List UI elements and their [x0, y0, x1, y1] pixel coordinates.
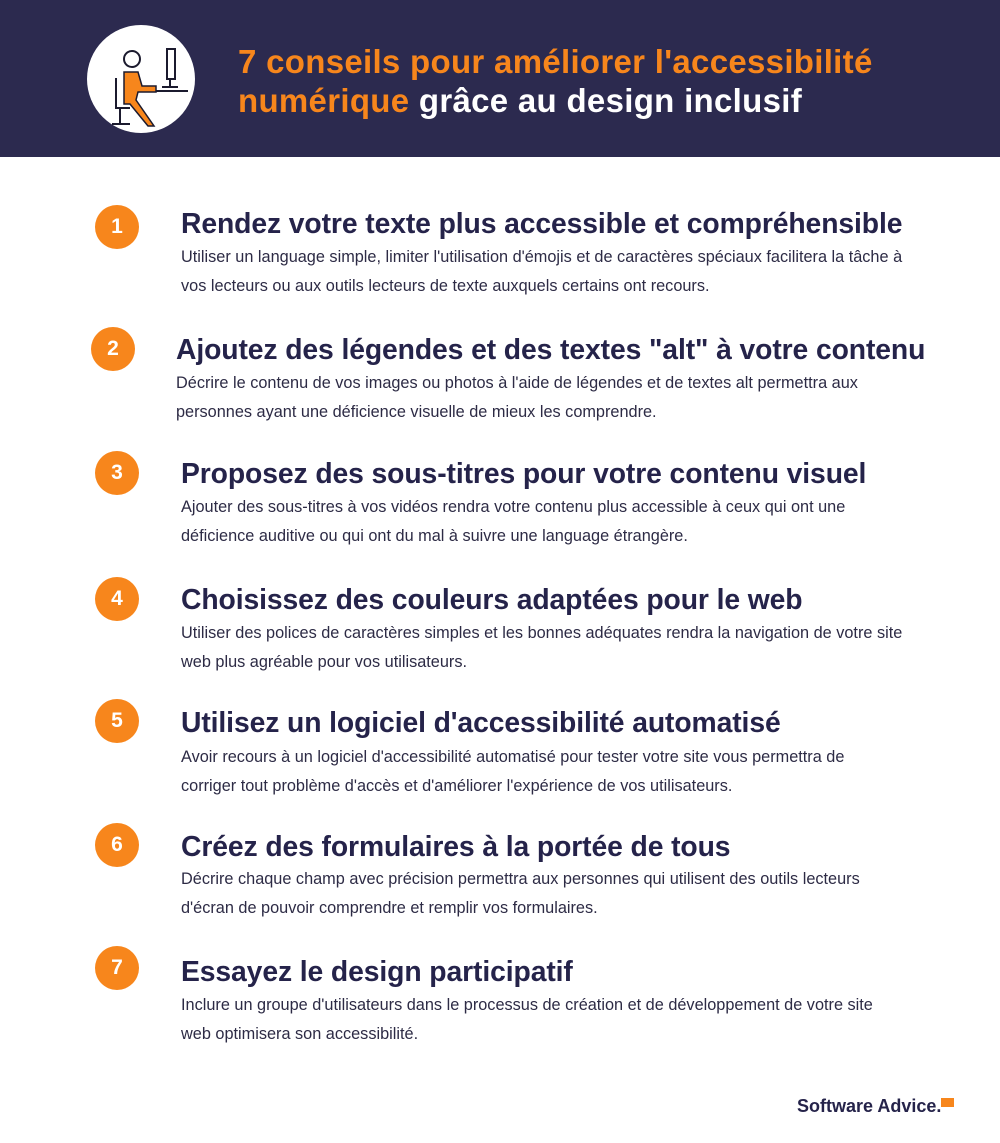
item 3 — [95, 451, 866, 545]
icon: person at computer — [87, 25, 195, 133]
item 7: Essayez le design participatif — [181, 955, 573, 987]
item 1: Rendez votre texte plus accessible et compréhensible — [181, 207, 902, 239]
item 6: Créez des formulaires à la portée de tous — [181, 830, 730, 862]
item 5: Avoir recours à un logiciel d'accessibilité automatisé pour tester votre site vous permettra de corriger tout problème d'accès et d'améliorer l'expérience de vos utilisateurs. — [181, 748, 844, 795]
item 3: 3 — [111, 461, 123, 484]
item 6: Décrire chaque champ avec précision permettra aux personnes qui utilisent des outils lecteurs d'écran de pouvoir comprendre et remplir vos formulaires. — [181, 870, 860, 917]
item 6: 6 — [111, 833, 123, 856]
title: 7 conseils pour améliorer l'accessibilité — [238, 43, 873, 80]
item 2: 2 — [107, 337, 119, 360]
item 2: Décrire le contenu de vos images ou photos à l'aide de légendes et de textes alt permettra aux personnes ayant une déficience visuelle de mieux les comprendre. — [176, 374, 858, 421]
item 4: Choisissez des couleurs adaptées pour le web — [181, 583, 802, 615]
item 6 — [95, 823, 860, 917]
item 2 — [91, 327, 925, 421]
item 1: Utiliser un language simple, limiter l'utilisation d'émojis et de caractères spéciaux facilitera la tâche à vos lecteurs ou aux outils lecteurs de texte auxquels certains ont recours. — [181, 248, 902, 295]
item 1: 1 — [111, 215, 123, 238]
logo: Software Advice. — [797, 1096, 941, 1116]
item 4: Utiliser des polices de caractères simples et les bonnes adéquates rendra la navigation de votre site web plus agréable pour vos utilisateurs. — [181, 624, 902, 671]
title — [238, 43, 873, 119]
item 5 — [95, 699, 844, 795]
item 1 — [95, 205, 902, 295]
item 7 — [95, 946, 873, 1043]
item 7: Inclure un groupe d'utilisateurs dans le processus de création et de développement de votre site web optimisera son accessibilité. — [181, 996, 873, 1043]
item 3: Ajouter des sous-titres à vos vidéos rendra votre contenu plus accessible à ceux qui ont une déficience auditive ou qui ont du mal à suivre une language étrangère. — [181, 498, 845, 545]
item 4: 4 — [111, 587, 123, 610]
item 5: 5 — [111, 709, 123, 732]
item 7: 7 — [111, 956, 123, 979]
title: numérique grâce au design inclusif — [238, 82, 802, 119]
header banner — [0, 0, 1000, 157]
item 5: Utilisez un logiciel d'accessibilité automatisé — [181, 706, 781, 738]
item 4 — [95, 577, 902, 671]
item 3: Proposez des sous-titres pour votre contenu visuel — [181, 457, 866, 489]
item 2: Ajoutez des légendes et des textes "alt" à votre contenu — [176, 333, 925, 365]
